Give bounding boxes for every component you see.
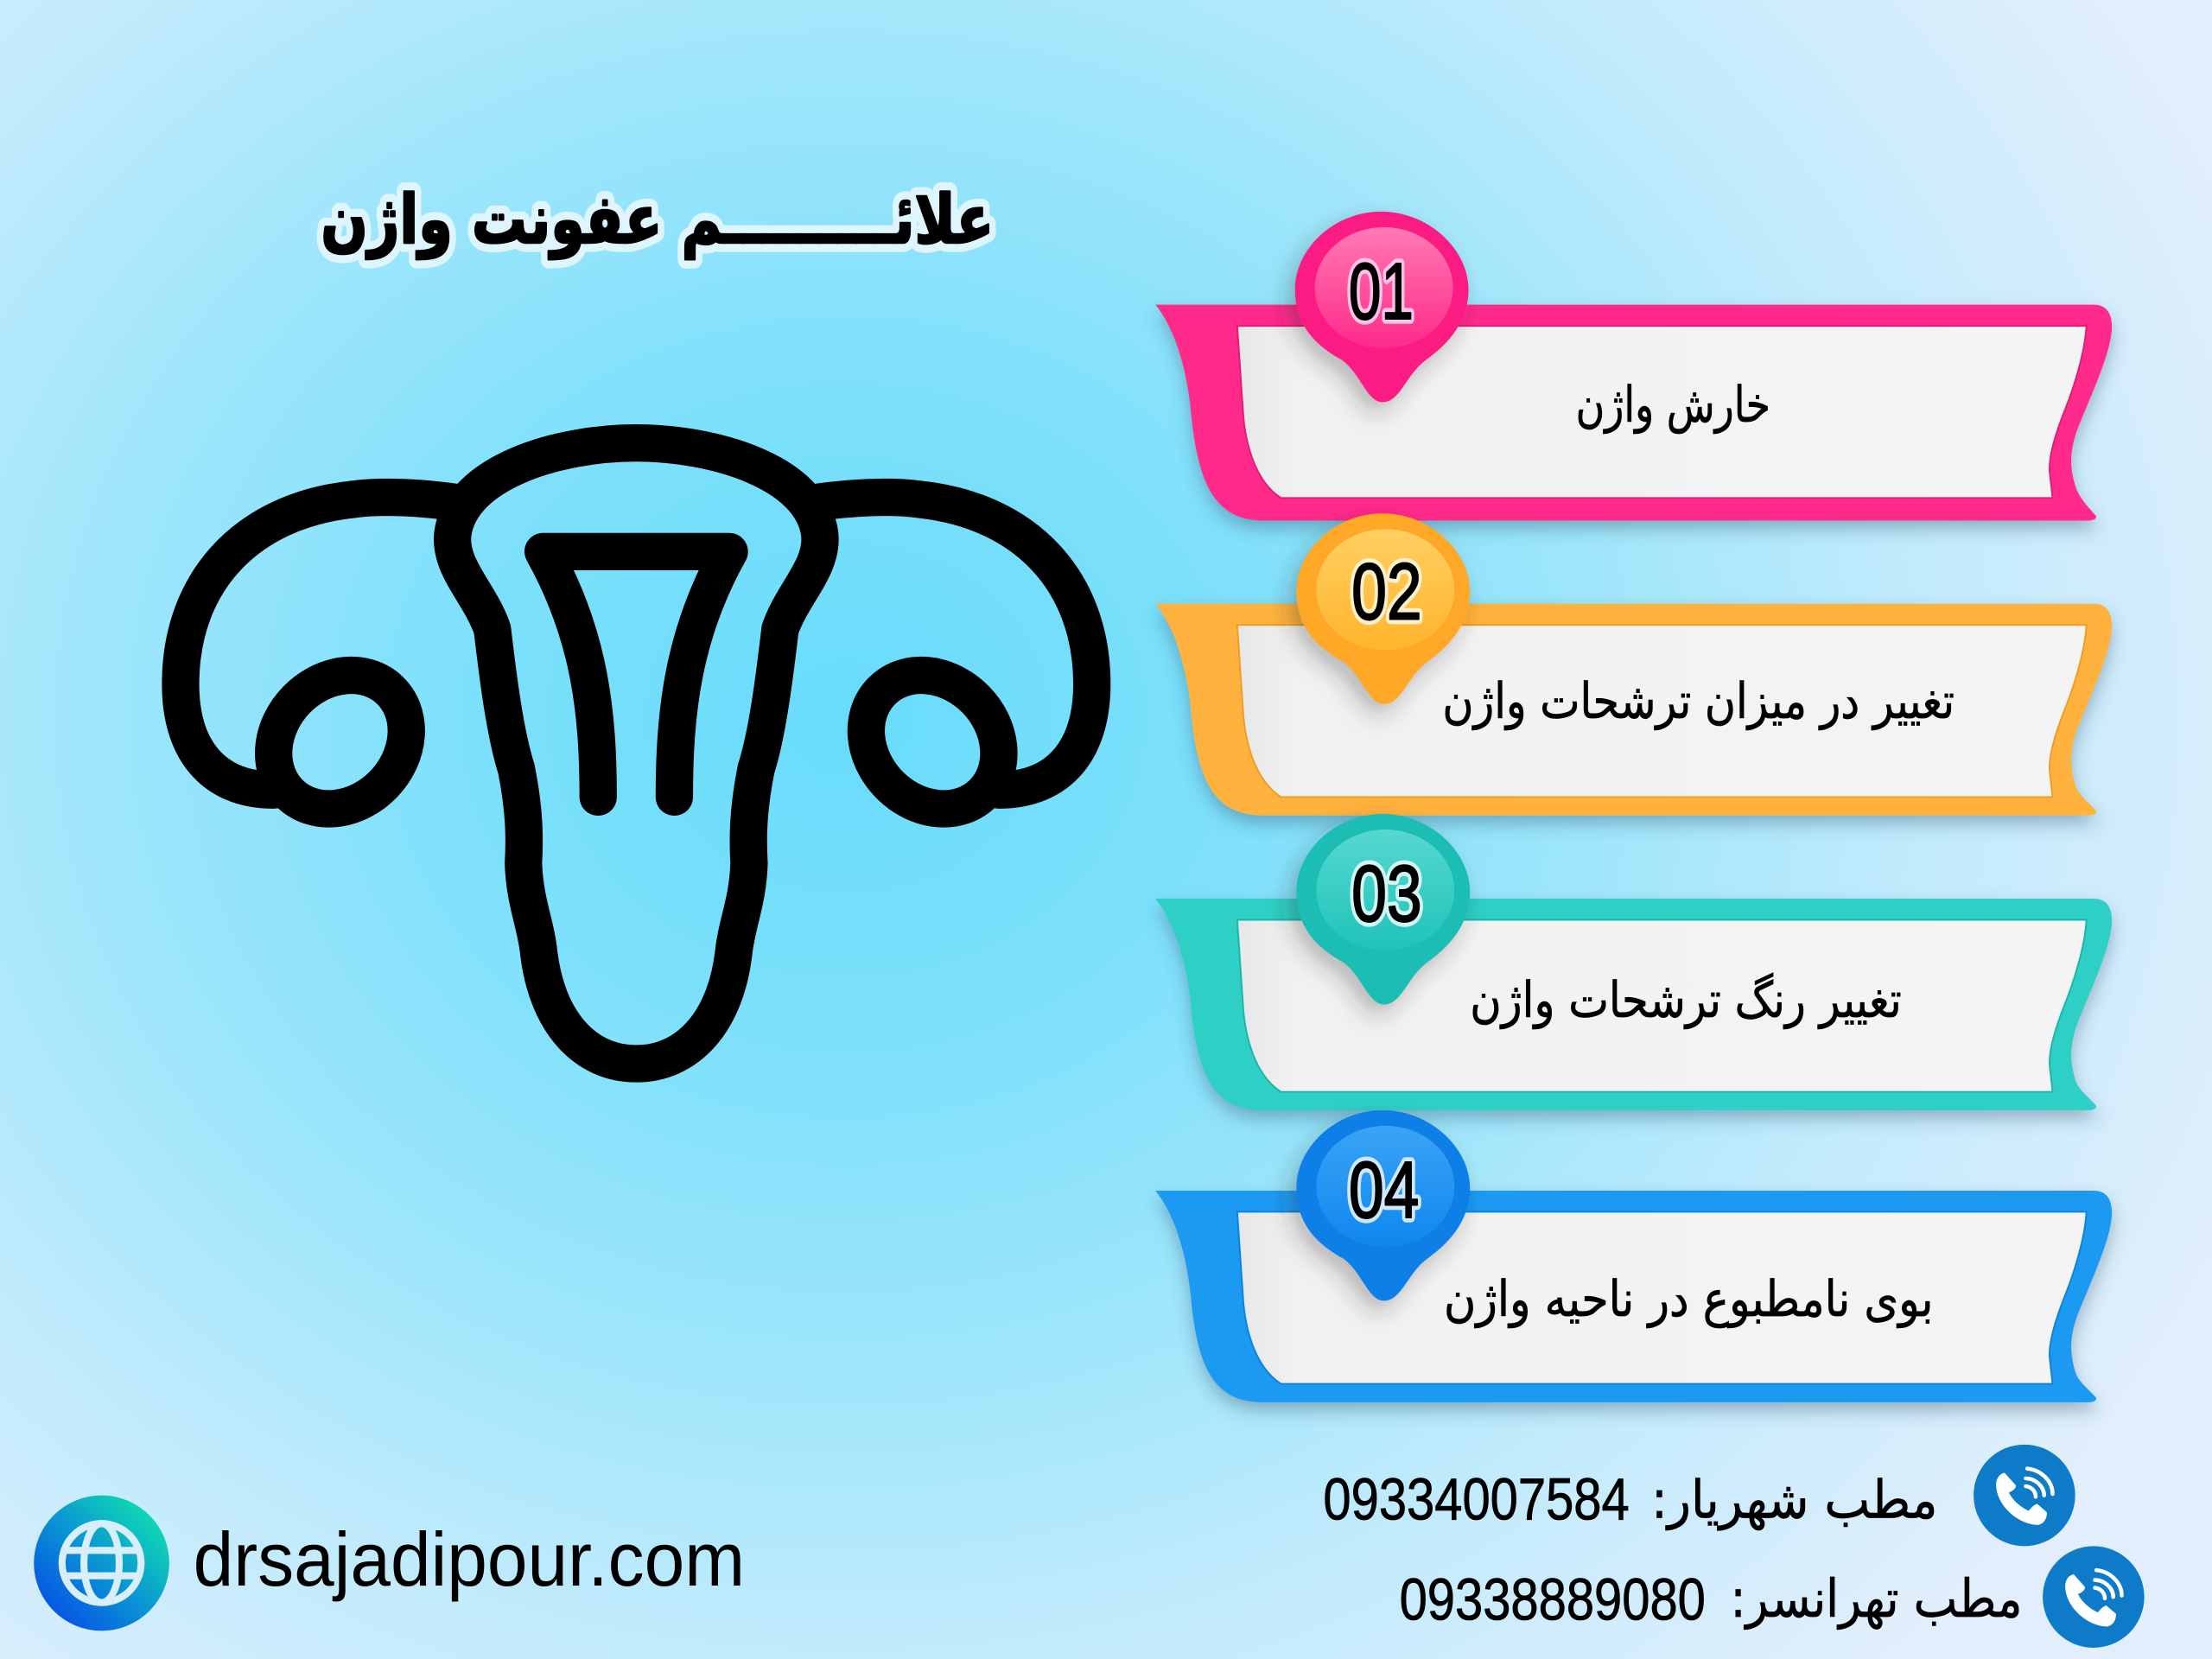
contact: shahriar office bbox=[1323, 1465, 1937, 1532]
card panel bbox=[1237, 326, 2087, 498]
pin 01 bbox=[1295, 212, 1469, 402]
pin 04 bbox=[1296, 1110, 1470, 1300]
card panel bbox=[1237, 625, 2087, 797]
pin 01: 01 bbox=[1349, 246, 1414, 336]
pin 01: 01 bbox=[1349, 246, 1414, 336]
pin 04: 04 bbox=[1349, 1145, 1419, 1235]
card frame bbox=[1155, 305, 2112, 520]
office name: مطب شهریار: bbox=[1651, 1471, 1937, 1531]
card frame bbox=[1155, 1191, 2112, 1402]
panel: symptom 2 bbox=[1155, 513, 2112, 816]
website: drsajadipour.com bbox=[194, 1516, 745, 1602]
title: علائـــــــــم عفونت واژن bbox=[321, 181, 994, 259]
left tube bbox=[181, 498, 454, 790]
pin 04: 04 bbox=[1349, 1145, 1419, 1235]
card panel bbox=[1237, 919, 2087, 1092]
pin 02 bbox=[1296, 513, 1470, 704]
symptom text: تغییر در میزان ترشحات واژن bbox=[1442, 673, 1955, 730]
pin 03 bbox=[1296, 814, 1470, 1005]
phone number: 09334007584 bbox=[1323, 1465, 1630, 1532]
icon: globe bbox=[34, 1496, 169, 1630]
icon: phone 1 bbox=[1974, 1445, 2075, 1546]
card panel bbox=[1237, 1211, 2087, 1384]
left ovary bbox=[246, 648, 434, 836]
symptom text: تغییر رنگ ترشحات واژن bbox=[1470, 972, 1902, 1029]
card frame bbox=[1155, 604, 2112, 816]
right tube bbox=[818, 498, 1092, 790]
contact: tehransar office bbox=[1400, 1566, 2022, 1632]
panel: symptom 4 bbox=[1155, 1110, 2112, 1402]
card frame bbox=[1155, 899, 2112, 1110]
office name: مطب تهرانسر: bbox=[1730, 1569, 2022, 1630]
symptom text: بوی نامطبوع در ناحیه واژن bbox=[1444, 1271, 1934, 1328]
uterus outline bbox=[453, 443, 820, 1064]
phone number: 09338889080 bbox=[1400, 1566, 1706, 1632]
pin 03: 03 bbox=[1351, 849, 1422, 938]
pin 02: 02 bbox=[1351, 547, 1422, 637]
title: علائـــــــــم عفونت واژن bbox=[321, 181, 994, 259]
panel: symptom 1 bbox=[1155, 212, 2112, 520]
panel: symptom 3 bbox=[1155, 814, 2112, 1110]
symptom text: خارش واژن bbox=[1576, 377, 1770, 434]
pin 02: 02 bbox=[1351, 547, 1422, 637]
icon: phone 2 bbox=[2043, 1546, 2145, 1648]
pin 03: 03 bbox=[1351, 849, 1422, 938]
right ovary bbox=[839, 648, 1027, 836]
inner canal bbox=[543, 551, 729, 797]
icon: uterus bbox=[181, 443, 1092, 1064]
